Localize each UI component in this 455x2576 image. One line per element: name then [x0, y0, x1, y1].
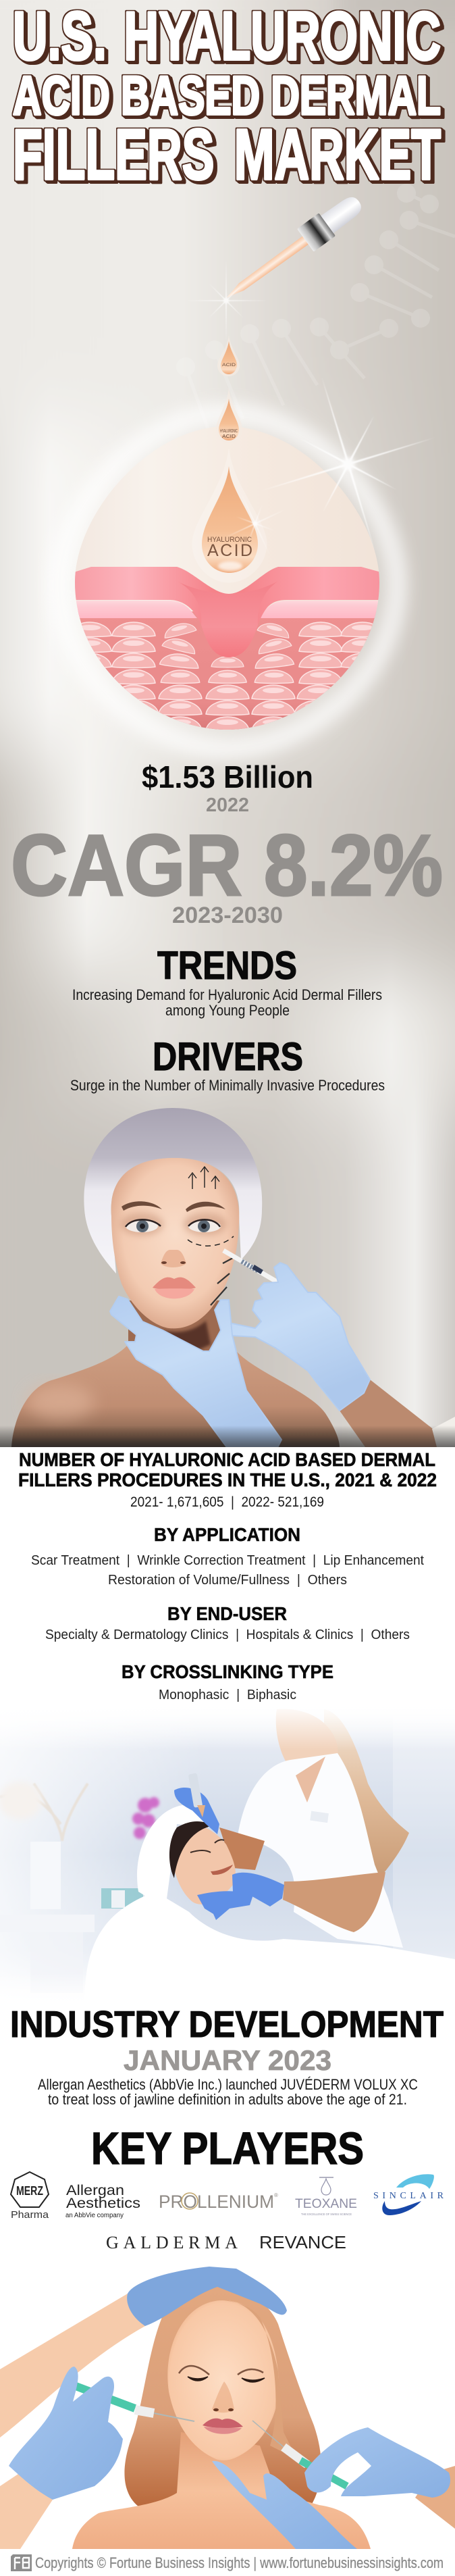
- icon: hyaluronic acid drop: [192, 449, 267, 582]
- trends: Increasing Demand for Hyaluronic Acid Dermal Fillers: [72, 986, 382, 1003]
- logo: Teoxane: TEOXANE: [295, 2197, 357, 2211]
- icon: medium drop: ACID: [222, 434, 236, 439]
- photo: clinic treatment: [0, 1703, 455, 2005]
- syringe: [223, 1251, 304, 1298]
- drivers: [70, 1035, 385, 1094]
- logo: Merz Pharma: Pharma: [11, 2209, 49, 2221]
- by crosslinking type: Monophasic | Biphasic: [159, 1688, 296, 1702]
- logo: Allergan Aesthetics: Aesthetics: [66, 2196, 140, 2211]
- logo: Teoxane: [295, 2177, 357, 2216]
- industry development: [10, 2003, 444, 2108]
- photo: woman with gloved hands and syringe: [0, 1108, 455, 1447]
- icon: dropper: [186, 190, 367, 341]
- icon: medium drop: [216, 387, 242, 443]
- drivers: Surge in the Number of Minimally Invasive Procedures: [70, 1077, 385, 1094]
- nurse: [219, 1709, 409, 1948]
- vase and shelf: [0, 1782, 143, 1993]
- logo: Fortune Business Insights: [11, 2554, 32, 2571]
- glove: right: [304, 2427, 450, 2498]
- logo: Allergan Aesthetics: Allergan: [66, 2183, 124, 2198]
- icon: small drop: [217, 335, 240, 376]
- glove: top: [127, 2267, 287, 2326]
- gloves and syringe: [174, 1773, 284, 1920]
- by application: BY APPLICATION: [154, 1524, 300, 1545]
- procedures stat heading: [18, 1449, 437, 1510]
- CAGR stat: 2023-2030: [172, 903, 283, 928]
- logos: Galderma and Revance: REVANCE: [259, 2232, 346, 2252]
- bottom shade: [0, 1425, 455, 1447]
- background panel: [0, 0, 455, 1540]
- arm and sleeve: [340, 1380, 455, 1447]
- market size stat: [142, 759, 313, 816]
- by application: Scar Treatment | Wrinkle Correction Treatment | Lip Enhancement: [31, 1553, 424, 1568]
- icon: hyaluronic acid drop: ACID: [207, 541, 252, 560]
- face: [167, 2300, 297, 2460]
- logo: Allergan Aesthetics: an AbbVie company: [65, 2212, 124, 2219]
- patient head: [137, 1805, 236, 1909]
- trends: TRENDS: [157, 944, 297, 988]
- trends: among Young People: [165, 1002, 290, 1019]
- by end-user: Specialty & Dermatology Clinics | Hospitals & Clinics | Others: [45, 1627, 410, 1642]
- key players heading: KEY PLAYERS: [91, 2123, 364, 2174]
- shoulders: [11, 1344, 340, 1447]
- orchid: [132, 1797, 159, 1839]
- neck and shoulders: [72, 2432, 371, 2549]
- by application: [31, 1524, 424, 1588]
- fat layer: [78, 611, 377, 730]
- illustration: skin cross-section egg: [68, 422, 392, 733]
- logos: Galderma and Revance: [106, 2232, 346, 2252]
- logo: Merz Pharma: MERZ: [16, 2184, 43, 2198]
- logo: Teoxane: THE EXCELLENCE OF SWISS SCIENCE: [301, 2213, 352, 2216]
- hair: [124, 2283, 321, 2506]
- glove: left: [9, 2367, 123, 2500]
- market size stat: 2022: [206, 794, 249, 816]
- photo: woman receiving injections: [0, 2267, 455, 2549]
- forehead arrows: [188, 1167, 219, 1189]
- logo: Allergan Aesthetics: [65, 2183, 140, 2219]
- dermis layer: [68, 567, 388, 657]
- industry development: to treat loss of jawline definition in adults above the age of 21.: [48, 2091, 407, 2108]
- halo around egg: [51, 413, 397, 777]
- logo: Prollenium: PROLLENIUM: [159, 2192, 274, 2212]
- gloved hand: right: [223, 1263, 370, 1411]
- drivers: DRIVERS: [153, 1035, 303, 1079]
- sparkles on egg: [211, 350, 455, 578]
- icon: medium drop: HYALURONIC: [220, 429, 238, 434]
- title: [13, 0, 441, 195]
- logo: Sinclair: [373, 2174, 444, 2215]
- logos: Galderma and Revance: GALDERMA: [106, 2233, 238, 2252]
- market size stat: $1.53 Billion: [142, 759, 313, 794]
- surgical cap: [84, 1108, 262, 1273]
- by application: Restoration of Volume/Fullness | Others: [108, 1573, 347, 1588]
- gloved hand: left: [110, 1296, 282, 1446]
- logo: Sinclair: SINCLAIR: [373, 2191, 444, 2201]
- industry development: JANUARY 2023: [124, 2044, 331, 2076]
- arms: [0, 2294, 455, 2549]
- syringe: left: [72, 2385, 194, 2421]
- glove: bottom: [212, 2461, 357, 2549]
- patient robe: [84, 1892, 455, 2005]
- by crosslinking type: [122, 1661, 333, 1702]
- icon: hyaluronic acid drop: HYALURONIC: [207, 536, 252, 544]
- light band: [68, 601, 388, 618]
- by end-user: [45, 1603, 410, 1642]
- logo: Merz Pharma: [11, 2172, 49, 2221]
- by end-user: BY END-USER: [167, 1603, 287, 1624]
- procedures stat heading: 2021- 1,671,605 | 2022- 521,169: [130, 1494, 324, 1510]
- decorative DNA helix: [176, 184, 455, 432]
- procedures stat heading: FILLERS PROCEDURES IN THE U.S., 2021 & 2022: [18, 1469, 437, 1490]
- by crosslinking type: BY CROSSLINKING TYPE: [122, 1661, 333, 1682]
- face: [111, 1158, 239, 1351]
- logo: Prollenium: ®: [274, 2192, 278, 2198]
- syringe: right: [252, 2421, 347, 2486]
- neck: [128, 1300, 233, 1361]
- trends: [72, 944, 382, 1019]
- white lower panel: [0, 1447, 455, 2576]
- icon: small drop: ACID: [222, 363, 236, 368]
